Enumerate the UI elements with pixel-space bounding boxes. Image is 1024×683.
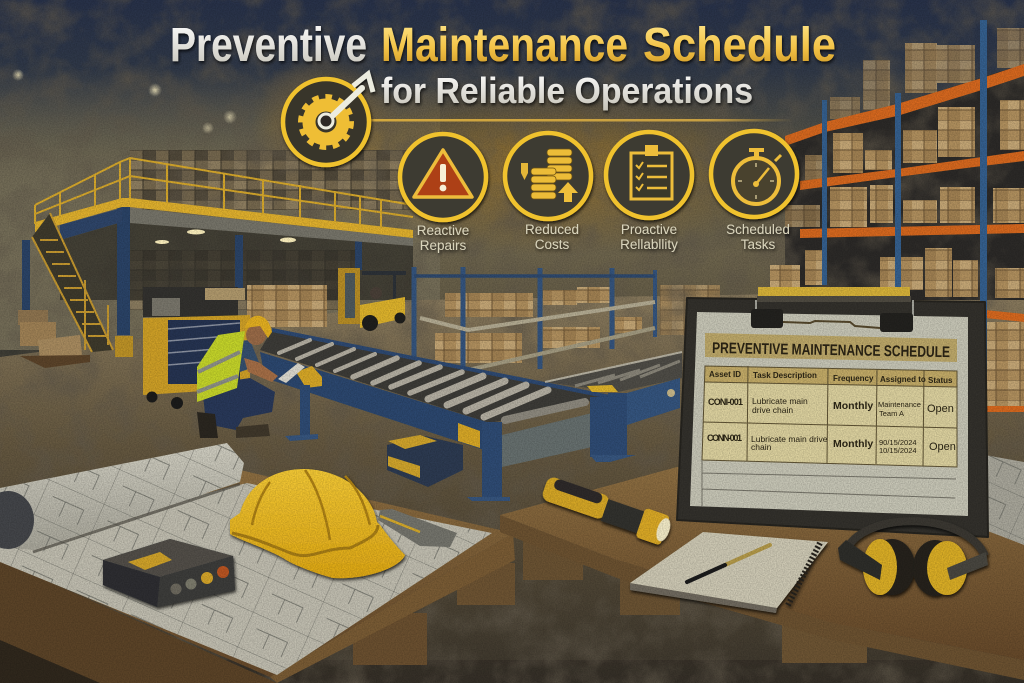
flashlight bbox=[539, 475, 674, 547]
blueprint sheet bbox=[0, 483, 492, 675]
right workbench bbox=[500, 455, 1024, 680]
schedule table: Team A bbox=[879, 409, 904, 418]
centre pallet rack bbox=[414, 267, 655, 370]
title heading: Preventive bbox=[170, 19, 367, 72]
clipboard table title bbox=[705, 333, 957, 362]
schedule table: Assigned to bbox=[880, 375, 926, 384]
right pallet racking bbox=[770, 20, 1024, 412]
schedule table: drive chain bbox=[752, 405, 793, 415]
icon labels: Costs bbox=[535, 237, 570, 252]
tool chest bbox=[143, 287, 250, 409]
icon: gear and wrench badge bbox=[283, 74, 373, 165]
icon labels: Scheduled bbox=[726, 222, 790, 237]
schedule table: CONN-001 bbox=[707, 433, 742, 443]
second conveyor bbox=[545, 352, 682, 455]
left workbench bbox=[0, 470, 515, 683]
stacked cartons on pallet bbox=[18, 310, 90, 368]
cartons behind tool chest bbox=[247, 285, 327, 327]
schedule table: 10/15/2024 bbox=[879, 446, 917, 455]
schedule table: Asset ID bbox=[709, 370, 741, 379]
icon: proactive reliability bbox=[606, 132, 692, 218]
icon labels bbox=[417, 222, 790, 253]
schedule table: Lubricate main drive bbox=[751, 434, 828, 444]
rolled blueprint bbox=[0, 443, 244, 552]
clipboard clip bbox=[751, 287, 913, 332]
schedule table: CONI-001 bbox=[708, 397, 743, 407]
icon labels: Tasks bbox=[741, 237, 776, 252]
schedule table: Open bbox=[929, 441, 956, 453]
schedule table: chain bbox=[751, 442, 772, 452]
icon labels: Repairs bbox=[420, 238, 467, 253]
staircase bbox=[32, 213, 133, 357]
title heading: Schedule bbox=[643, 19, 836, 72]
schedule table: Open bbox=[927, 403, 954, 415]
forklift bbox=[338, 268, 406, 331]
gold divider line bbox=[368, 119, 793, 122]
icon labels: Reduced bbox=[525, 222, 579, 237]
clipboard bbox=[677, 287, 988, 537]
title heading bbox=[170, 19, 836, 72]
icon: reactive repairs bbox=[400, 134, 486, 220]
worker inspecting conveyor bbox=[197, 316, 305, 438]
subtitle: for Reliable Operations bbox=[381, 70, 753, 111]
schedule table: 90/15/2024 bbox=[879, 438, 917, 447]
wrench bbox=[378, 509, 457, 547]
schedule table: Status bbox=[928, 376, 953, 385]
ear defenders bbox=[838, 521, 988, 596]
icon: scheduled tasks bbox=[711, 131, 797, 217]
title heading: Maintenance bbox=[381, 19, 628, 72]
schedule table: Monthly bbox=[833, 400, 873, 412]
icon labels: Rellabllity bbox=[620, 237, 678, 252]
battery toolbox bbox=[387, 435, 463, 487]
schedule table: Maintenance bbox=[878, 400, 921, 409]
clipboard table title: PREVENTIVE MAINTENANCE SCHEDULE bbox=[712, 340, 950, 361]
roller conveyor bbox=[260, 330, 636, 501]
icon: reduced costs bbox=[505, 133, 591, 219]
spiral notebook and pen bbox=[630, 532, 828, 613]
schedule table: Task Description bbox=[753, 371, 817, 380]
icon labels: Reactive bbox=[417, 223, 469, 238]
schedule table: Lubricate main bbox=[752, 396, 808, 406]
icon labels: Proactive bbox=[621, 222, 677, 237]
schedule table: Frequency bbox=[833, 374, 874, 383]
mezzanine platform bbox=[22, 158, 413, 335]
handheld meter bbox=[103, 539, 235, 607]
hard hat bbox=[230, 469, 405, 578]
schedule table bbox=[702, 366, 957, 467]
schedule table: Monthly bbox=[833, 438, 873, 450]
